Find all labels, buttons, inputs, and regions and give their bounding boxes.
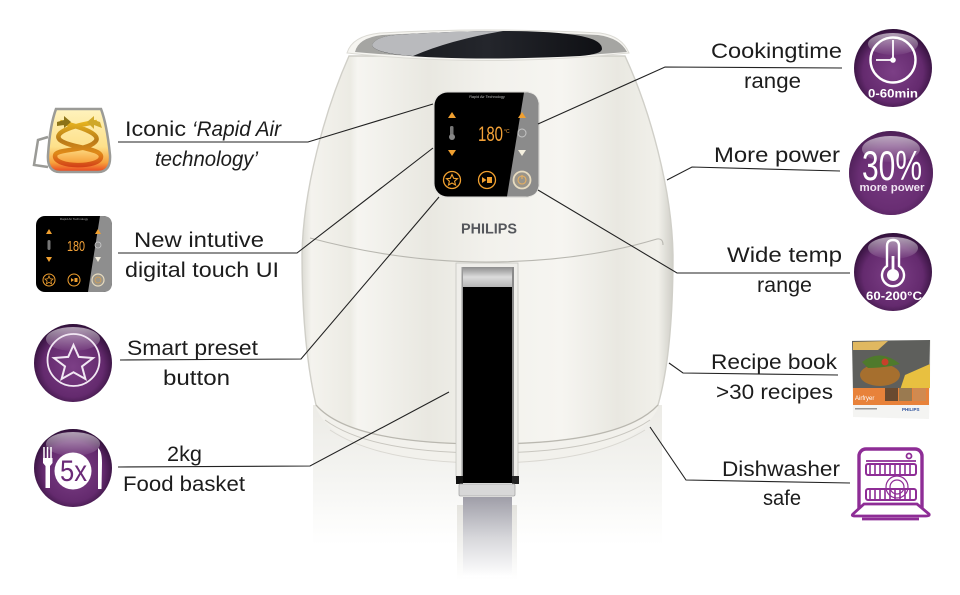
label: rapid air: ‘Rapid Air — [192, 117, 282, 141]
icon: dishwasher — [852, 449, 929, 519]
label: preset: button — [163, 366, 230, 390]
icon: temperature — [854, 233, 932, 311]
icon: temperature: 60-200°C — [866, 289, 922, 303]
label: basket — [123, 442, 245, 496]
icon: recipe book — [852, 340, 931, 419]
icon: cooking time: 0-60min — [868, 86, 918, 100]
leader line: cooking time — [538, 67, 842, 124]
label: basket: 2kg — [167, 442, 202, 466]
label: dishwasher — [722, 457, 840, 510]
fryer body — [302, 56, 673, 444]
label: cooking time: range — [744, 69, 801, 93]
rim — [347, 30, 629, 60]
PHILIPS logo: PHILIPS — [461, 220, 517, 238]
leader line: dishwasher — [650, 427, 850, 483]
label: temp range: range — [757, 273, 812, 297]
label: rapid air — [125, 117, 282, 171]
handle reflection — [457, 497, 517, 580]
label: recipe book: Recipe book — [711, 350, 837, 374]
control panel: Rapid Air Technology — [469, 95, 505, 99]
control panel: °C — [504, 129, 510, 135]
icon: 5x food basket: 5x — [60, 455, 87, 488]
leader line: temperature — [538, 190, 850, 273]
label: basket: Food basket — [123, 472, 245, 496]
label: cooking time — [711, 39, 842, 93]
label: touch UI: digital touch UI — [125, 258, 279, 282]
icon: touch UI — [36, 216, 112, 292]
icon: recipe book: PHILIPS — [902, 407, 920, 412]
label: more power: More power — [714, 143, 840, 167]
lid — [372, 31, 602, 58]
air fryer product image — [302, 30, 673, 580]
label: rapid air: technology’ — [155, 147, 259, 171]
icon: 30% more power: 30% — [862, 142, 922, 189]
leader line: rapid air — [118, 104, 433, 142]
icon: cooking time — [854, 29, 932, 107]
label: rapid air: Iconic — [125, 117, 186, 141]
leader line: food basket — [118, 392, 449, 467]
icon: touch UI: Rapid Air Technology — [60, 217, 89, 221]
label: preset — [127, 336, 258, 390]
icon: 30% more power — [849, 131, 933, 215]
label: recipe book — [711, 350, 837, 404]
icon: 30% more power: more power — [860, 182, 925, 194]
control panel — [433, 91, 540, 198]
icon: rapid air — [34, 109, 110, 172]
handle — [456, 263, 519, 496]
leader line: touch UI — [118, 148, 433, 253]
label: temp range — [727, 243, 842, 297]
leader line: preset button — [120, 197, 439, 360]
basket seam — [310, 238, 663, 262]
fryer base ring — [316, 395, 658, 463]
label: recipe book: >30 recipes — [716, 380, 833, 404]
label: dishwasher: safe — [763, 486, 801, 510]
leader line: recipe book — [669, 363, 838, 375]
label: dishwasher: Dishwasher — [722, 457, 840, 481]
label: touch UI: New intutive — [134, 228, 264, 252]
label: touch UI — [125, 228, 279, 282]
icon: preset star — [34, 324, 112, 402]
label: temp range: Wide temp — [727, 243, 842, 267]
label: cooking time: Cookingtime — [711, 39, 842, 63]
control panel: 180 — [478, 123, 503, 146]
icon: 5x food basket — [34, 429, 112, 507]
leader line: more power — [667, 167, 840, 180]
icon: recipe book: Airfryer — [855, 396, 874, 402]
icon: touch UI: 180 — [67, 238, 85, 255]
label: preset: Smart preset — [127, 336, 258, 360]
reflection under fryer — [313, 405, 662, 545]
